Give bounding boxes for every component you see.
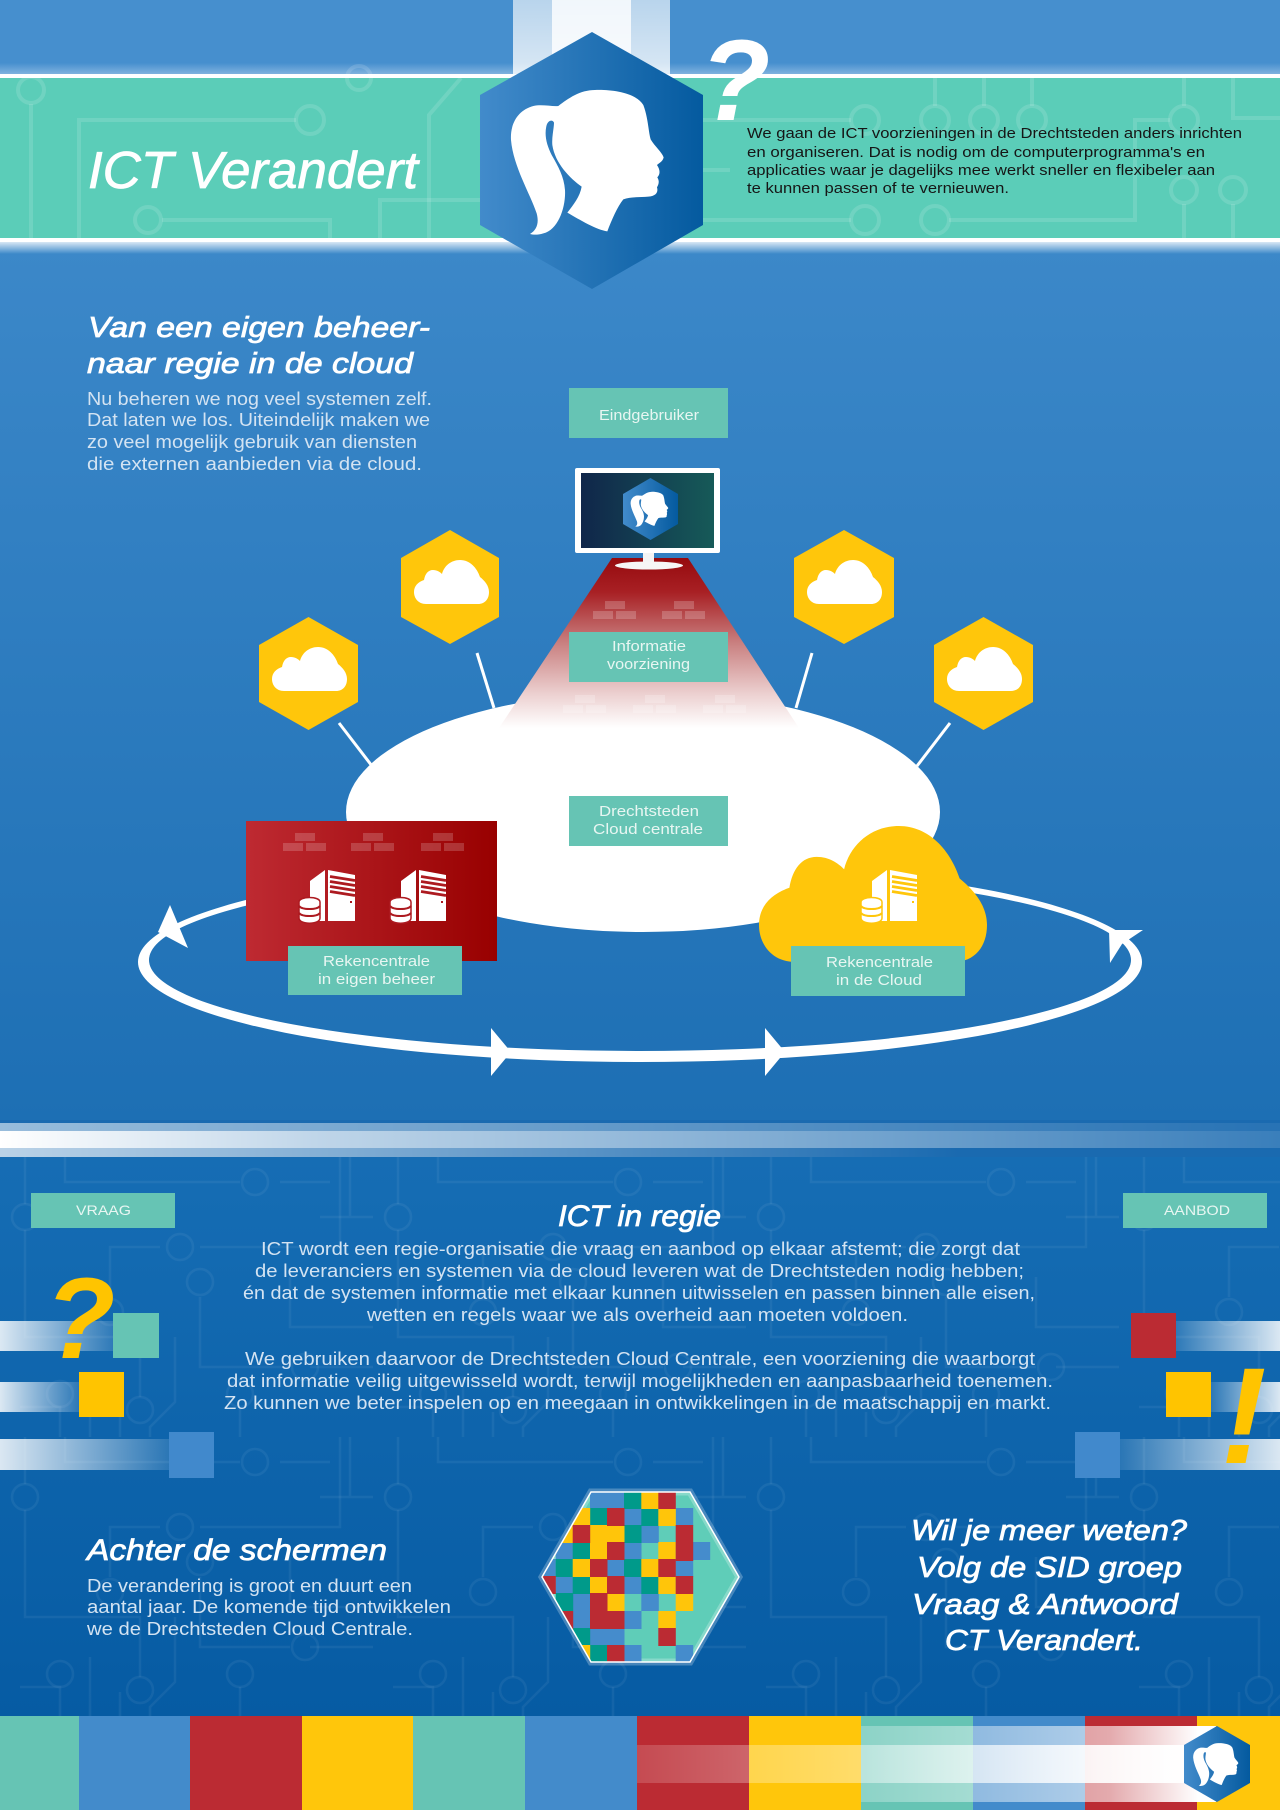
- intro text: We gaan de ICT voorzieningen in de Drechtsteden anders inrichten: [747, 126, 1242, 142]
- label: Drechtsteden Cloud centrale: Cloud centrale: [593, 821, 703, 838]
- icon: cloud hexagon 1: [401, 530, 499, 644]
- text: ICT in regie: én dat de systemen informatie met elkaar kunnen uitwisselen en passen binnen alle eisen,: [243, 1283, 1035, 1303]
- aanbod decoration: stripes, squares, exclamation mark: !: [1221, 1340, 1267, 1493]
- text: ICT in regie: dat informatie veilig uitgewisseld wordt, terwijl mogelijkheden en aanpasbaarheid toenemen.: [227, 1371, 1053, 1391]
- label: Eindgebruiker: [569, 388, 728, 438]
- text: Achter de schermen: [86, 1576, 451, 1639]
- connector lines: [339, 653, 950, 766]
- text: section intro: Dat laten we los. Uiteindelijk maken we: [87, 410, 430, 430]
- label: VRAAG: VRAAG: [76, 1202, 131, 1218]
- text: ICT in regie: wetten en regels waar we als overheid aan moeten voldoen.: [366, 1305, 908, 1325]
- label: Eindgebruiker: Eindgebruiker: [599, 407, 699, 424]
- panel: rekencentrale in eigen beheer: Rekencentrale: [323, 953, 430, 970]
- Drechtsteden cloud ellipse: [346, 692, 940, 932]
- icon: cloud hexagon 3: [794, 530, 894, 644]
- icon: white question mark: ?: [700, 17, 770, 145]
- intro text: en organiseren. Dat is nodig om de computerprogramma's en: [747, 145, 1205, 161]
- text: Wil je meer weten: [911, 1515, 1188, 1657]
- page background: blue main section: [0, 242, 1280, 1120]
- text: Wil je meer weten: CT Verandert.: [945, 1625, 1143, 1657]
- text: ICT in regie: Zo kunnen we beter inspelen op en meegaan in ontwikkelingen in de maatschappij en markt.: [224, 1393, 1051, 1413]
- label: AANBOD: [1123, 1193, 1267, 1228]
- icon: mosaic hexagon: [538, 1492, 739, 1663]
- heading: ICT in regie: ICT in regie: [558, 1200, 721, 1233]
- label: Drechtsteden Cloud centrale: [569, 796, 728, 846]
- red information beam with bricks: [499, 558, 799, 728]
- intro text: te kunnen passen of te vernieuwen.: [747, 181, 1009, 197]
- text: ICT in regie: de leveranciers en systemen via de cloud leveren wat de Drechtsteden nodig hebben;: [255, 1261, 1024, 1281]
- text: ICT in regie: ICT wordt een regie-organisatie die vraag en aanbod op elkaar afstemt; die zorgt dat: [261, 1239, 1020, 1259]
- top light stripes: [513, 0, 670, 74]
- text: Achter de schermen: aantal jaar. De komende tijd ontwikkelen: [87, 1597, 451, 1617]
- label: Drechtsteden Cloud centrale: Drechtsteden: [599, 803, 699, 820]
- heading: van eigen beheer naar regie: [87, 312, 430, 380]
- text: section intro: [87, 389, 432, 474]
- aanbod decoration: stripes, squares, exclamation mark: [1075, 1313, 1280, 1493]
- icon: cloud hexagon 2: [259, 617, 358, 730]
- ring with arrows: [138, 862, 1143, 1076]
- icon: monitor: [575, 468, 720, 570]
- label: VRAAG: [31, 1193, 175, 1228]
- heading: van eigen beheer naar regie: Van een eigen beheer-: [88, 312, 430, 344]
- text: section intro: Nu beheren we nog veel systemen zelf.: [87, 389, 432, 409]
- footer colour stripes: [0, 1716, 1280, 1810]
- intro text: [747, 126, 1242, 197]
- label: Informatie voorziening: voorziening: [607, 656, 690, 673]
- header band with circuit pattern: [0, 0, 1280, 254]
- label: Informatie voorziening: [569, 632, 728, 682]
- vraag decoration: stripes, squares, question mark: [0, 1255, 214, 1478]
- icon: hexagon with head silhouette: [480, 32, 703, 289]
- heading: van eigen beheer naar regie: naar regie in de cloud: [87, 348, 414, 380]
- text: Achter de schermen: De verandering is groot en duurt een: [87, 1576, 412, 1596]
- label: AANBOD: AANBOD: [1164, 1202, 1230, 1218]
- panel: rekencentrale in de cloud: [759, 826, 987, 996]
- panel: rekencentrale in eigen beheer: [246, 821, 497, 995]
- text: Wil je meer weten: Vraag & Antwoord: [912, 1589, 1179, 1621]
- text: ICT in regie: [224, 1239, 1053, 1413]
- icon: footer hexagon with head: [1184, 1726, 1250, 1802]
- text: Wil je meer weten: Wil je meer weten?: [911, 1515, 1188, 1547]
- label: Informatie voorziening: Informatie: [612, 638, 686, 655]
- heading: Achter de schermen: Achter de schermen: [85, 1534, 387, 1567]
- text: ICT in regie: We gebruiken daarvoor de Drechtsteden Cloud Centrale, een voorziening die waarborgt: [245, 1349, 1035, 1369]
- intro text: applicaties waar je dagelijks mee werkt sneller en flexibeler aan: [747, 163, 1215, 179]
- text: section intro: zo veel mogelijk gebruik van diensten: [87, 432, 417, 452]
- lower section background: [0, 1120, 1280, 1716]
- panel: rekencentrale in de cloud: Rekencentrale: [826, 954, 933, 971]
- icon: cloud hexagon 4: [934, 617, 1033, 730]
- text: Wil je meer weten: Volg de SID groep: [917, 1552, 1182, 1584]
- divider stripes: [0, 1123, 1280, 1157]
- title: ICT Verandert: [88, 142, 421, 200]
- vraag decoration: stripes, squares, question mark: ?: [45, 1255, 115, 1383]
- panel: rekencentrale in de cloud: in de Cloud: [836, 972, 922, 989]
- text: Achter de schermen: we de Drechtsteden Cloud Centrale.: [86, 1619, 413, 1639]
- panel: rekencentrale in eigen beheer: in eigen beheer: [318, 971, 435, 988]
- text: section intro: die externen aanbieden via de cloud.: [87, 454, 422, 474]
